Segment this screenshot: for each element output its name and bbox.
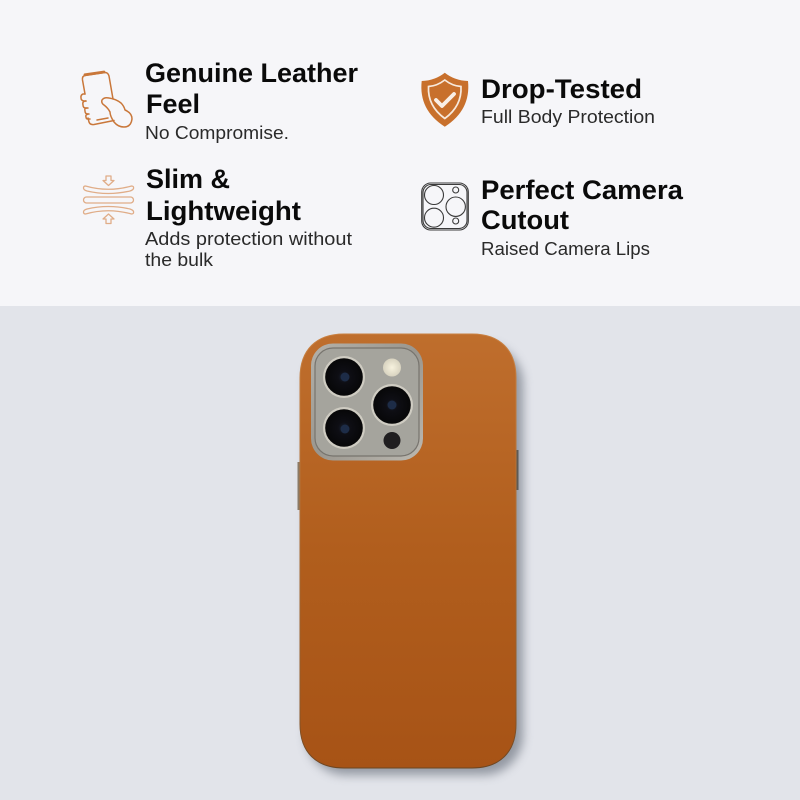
heading: Slim & Lightweight [146,164,301,226]
case drop shadow [306,344,523,775]
camera module [311,344,423,460]
icon: hand holding phone [81,72,132,127]
text: Raised Camera Lips: Raised Camera Lips [481,239,650,259]
flash [383,358,401,376]
icon: shield with check [421,73,468,127]
panel: product background [0,306,800,800]
panel: features background [0,0,800,306]
heading: Genuine Leather Feel [145,58,358,119]
lens: bottom left [323,407,365,449]
lens: top left [323,356,365,398]
lens: right [371,384,413,426]
heading: Slim & Lightweight: Lightweight [146,196,301,226]
heading: Genuine Leather Feel: Feel [146,89,200,119]
phone case [298,334,523,775]
icon: camera module outline [422,183,468,230]
text: Adds protection without the bulk: Adds protection without [145,229,352,249]
heading: Slim & Lightweight: Slim & [146,164,230,194]
text: Full Body Protection: Full Body Protection [481,107,655,127]
heading: Perfect Camera Cutout: Cutout [481,205,569,235]
heading: Perfect Camera Cutout: Perfect Camera [481,175,684,205]
lidar sensor [384,432,400,449]
text: Adds protection without the bulk [145,229,352,270]
case body [300,334,516,768]
text: No Compromise: No Compromise. [145,123,289,143]
side buttons [298,450,518,510]
text: Adds protection without the bulk: the bulk [145,250,214,270]
heading: Perfect Camera Cutout [481,175,684,235]
heading: Genuine Leather Feel: Genuine Leather [145,58,358,88]
icon: compression arrows and layers [84,176,134,224]
heading: Drop-Tested: Drop-Tested [481,74,642,104]
